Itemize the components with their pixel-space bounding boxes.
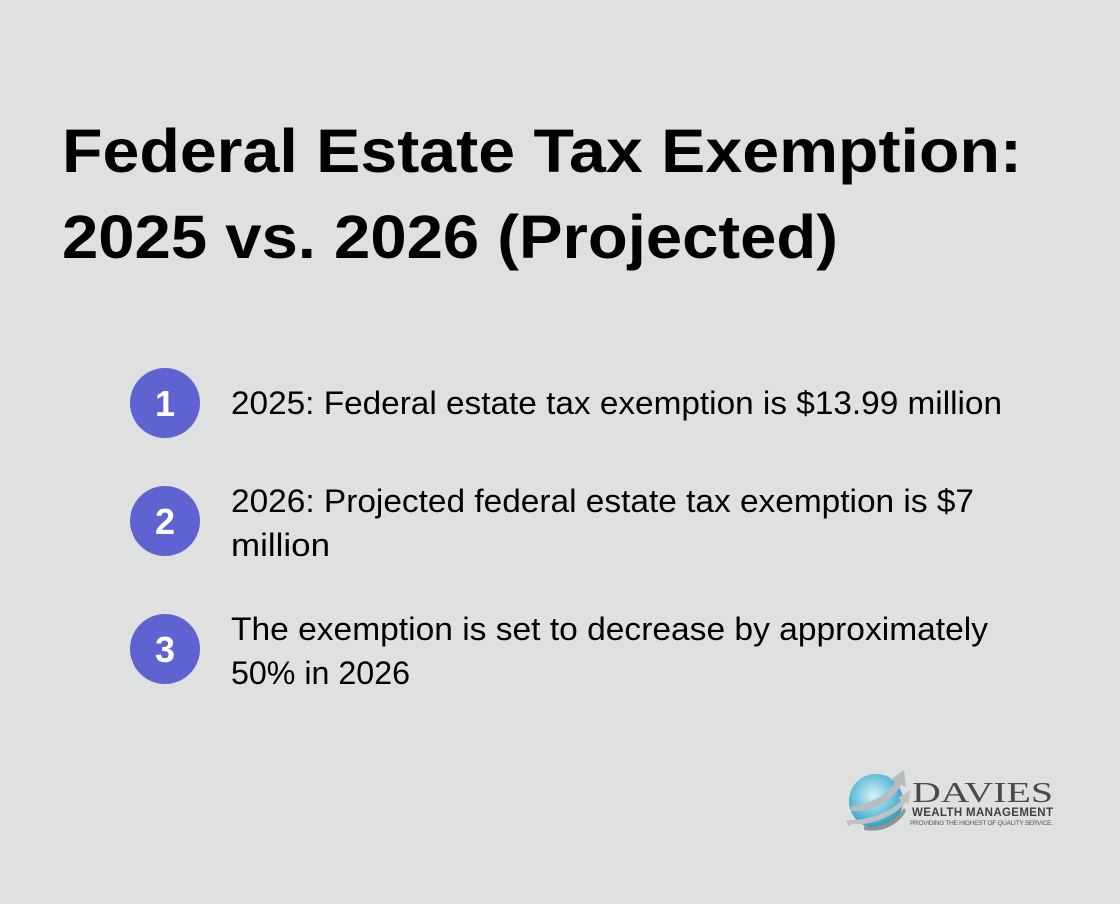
title: 2025 vs. 2026 (Projected) [62,203,838,271]
list item 3: The exemption is set to decrease by approximately [231,611,989,647]
title: Federal Estate Tax Exemption: [62,117,1022,185]
list item 1 [130,368,1002,438]
tagline: WEALTH MANAGEMENT [912,807,1053,819]
list item 2 [130,483,974,563]
list item 2: 2 [155,501,175,542]
list item 1: 1 [155,383,175,424]
list item 1: 2025: Federal estate tax exemption is $13.99 million [231,385,1002,421]
list item 3 [130,611,989,691]
list item 3: 3 [155,629,175,670]
list item 3: 50% in 2026 [231,655,410,691]
list item 2: million [231,527,330,563]
logo: Davies Wealth Management [846,770,1053,831]
tagline: PROVIDING THE HIGHEST OF QUALITY SERVICE. [910,820,1053,827]
wordmark: DAVIES [912,778,1053,809]
list item 2: 2026: Projected federal estate tax exemption is $7 [231,483,974,519]
tagline [910,807,1053,827]
title [62,117,1022,271]
icon: globe with arrows [846,770,910,831]
